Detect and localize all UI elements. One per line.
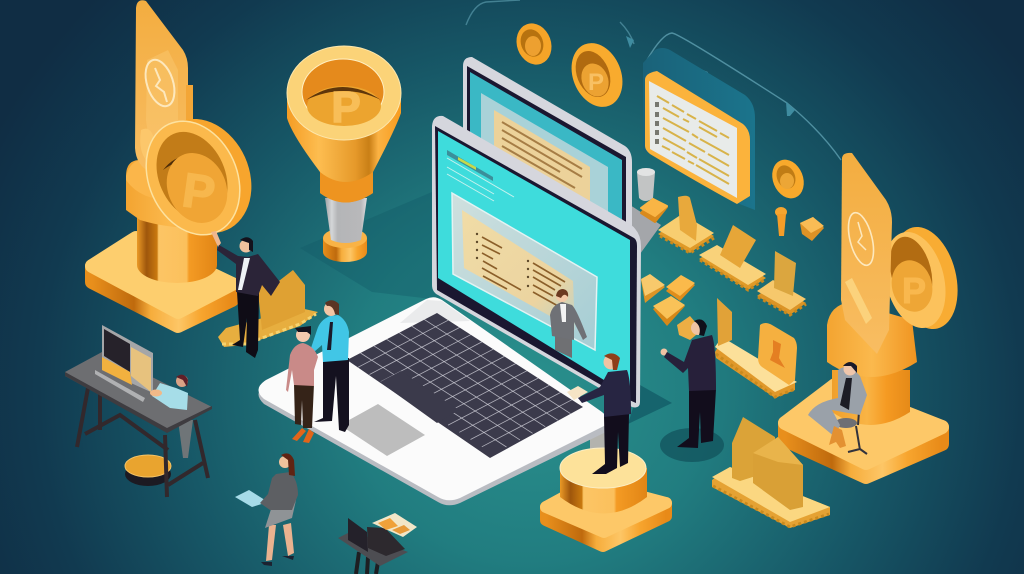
blue shirt tie xyxy=(327,322,333,350)
house plate xyxy=(712,467,830,528)
back frame xyxy=(463,57,632,230)
shirt xyxy=(238,258,250,290)
gold houses on plate xyxy=(712,417,830,528)
floating coin top one xyxy=(511,18,557,70)
small desk with device xyxy=(338,513,417,574)
floor shadow behind laptop xyxy=(300,192,440,300)
pedestal base xyxy=(546,483,666,546)
desk chair xyxy=(178,420,193,458)
legs xyxy=(266,523,294,561)
main laptop xyxy=(258,116,641,505)
funnel rim: P xyxy=(331,83,361,132)
right house xyxy=(753,437,803,510)
funnel collar xyxy=(320,172,373,202)
trophy coin xyxy=(129,103,269,250)
desk legs xyxy=(77,376,208,497)
seated suit xyxy=(808,367,867,437)
long plate xyxy=(715,337,797,398)
floating coin small right xyxy=(767,155,809,203)
pink head xyxy=(295,326,311,342)
card gold frame xyxy=(645,71,750,204)
floor shadow right of laptop xyxy=(628,385,672,424)
legs xyxy=(592,414,629,474)
legs xyxy=(232,292,259,358)
pink torso xyxy=(286,343,318,392)
trophy coin: P xyxy=(179,164,218,221)
jacket xyxy=(260,472,298,510)
amber icon card xyxy=(758,323,797,385)
plate xyxy=(218,308,318,347)
man with raised arm xyxy=(211,231,280,358)
mini bulb xyxy=(775,207,787,236)
laptop support post xyxy=(590,430,606,456)
right upright plate xyxy=(841,153,892,354)
right column xyxy=(832,370,910,425)
card sheet xyxy=(649,81,737,198)
token diamond three xyxy=(653,296,685,326)
back cream sheet xyxy=(494,110,590,205)
skirt xyxy=(265,500,296,528)
small gold tokens right xyxy=(630,168,824,340)
jacket xyxy=(664,335,716,391)
head xyxy=(240,237,253,252)
laptop base xyxy=(258,297,608,505)
chair xyxy=(835,398,867,454)
desk worker xyxy=(150,375,188,410)
back bezel xyxy=(467,66,626,225)
person in grey suit on screen xyxy=(550,289,587,358)
pedestal under person xyxy=(546,448,666,546)
token block behind man xyxy=(677,316,702,340)
mini cube xyxy=(800,217,824,241)
right coin: P xyxy=(902,270,926,311)
pink legs xyxy=(294,384,314,428)
document card xyxy=(643,48,755,210)
token plate near screen xyxy=(641,274,665,303)
crate xyxy=(258,270,305,330)
hands xyxy=(660,348,668,356)
funnel gold body xyxy=(287,95,401,202)
desk with worker xyxy=(65,325,212,497)
coin below desk xyxy=(125,455,171,486)
icon plate with card xyxy=(715,298,797,398)
head xyxy=(691,319,707,336)
screen glass panel xyxy=(452,193,597,350)
blue shirt torso xyxy=(311,315,349,362)
token plate three xyxy=(757,251,806,315)
card text lines xyxy=(657,96,729,184)
gold crate and plate by man xyxy=(218,270,318,347)
pedestal drum xyxy=(560,448,647,514)
token plate one xyxy=(658,196,714,253)
trophy upright plate xyxy=(135,0,193,172)
back cyan screen xyxy=(470,72,622,222)
small desk top xyxy=(338,531,408,566)
laptop bezel xyxy=(435,126,637,403)
right base xyxy=(785,385,942,477)
floating coin top two xyxy=(562,35,632,115)
desk top xyxy=(65,352,212,433)
funnel rim xyxy=(287,46,401,140)
funnel silver stem xyxy=(325,198,367,243)
left trophy xyxy=(92,0,269,326)
trophy base xyxy=(92,238,232,326)
trackpad xyxy=(340,404,425,456)
trophy column xyxy=(126,160,217,283)
small monitor xyxy=(348,518,368,552)
screen header xyxy=(447,150,514,201)
person in blue shirt xyxy=(311,300,349,432)
card blue backing xyxy=(643,48,755,210)
right trophy xyxy=(785,153,968,477)
seated man in grey xyxy=(808,362,867,454)
silver cup xyxy=(637,168,655,201)
funnel coin xyxy=(287,46,401,262)
jacket xyxy=(217,245,280,296)
connector arcs xyxy=(466,0,841,160)
desk monitor xyxy=(95,325,153,402)
person at laptop xyxy=(567,353,631,474)
funnel lower cup xyxy=(323,228,367,262)
silver funnel bracket xyxy=(630,205,661,254)
legs xyxy=(677,389,716,448)
standing man right xyxy=(660,319,724,462)
legs xyxy=(829,426,846,448)
old laptop back screen xyxy=(463,57,632,230)
back glass panel xyxy=(481,93,608,222)
orange shoes xyxy=(292,428,314,443)
laptop screen frame xyxy=(432,116,641,407)
blue shirt head xyxy=(324,300,339,316)
right coin xyxy=(875,220,968,336)
upright slab xyxy=(717,298,732,346)
raised hand xyxy=(211,231,221,247)
open report xyxy=(372,513,417,537)
person in pink sweater xyxy=(286,326,318,443)
screen cream panel xyxy=(462,210,575,330)
floating coin top two: P xyxy=(588,69,604,96)
head xyxy=(279,453,295,476)
small desk legs xyxy=(356,552,378,574)
left house xyxy=(732,417,775,481)
paper xyxy=(235,490,268,507)
head xyxy=(604,353,620,370)
head xyxy=(843,362,857,376)
card bullets xyxy=(655,102,659,144)
keyboard xyxy=(347,313,583,458)
token diamond two xyxy=(666,275,695,301)
floor shadow xyxy=(660,428,724,462)
card xyxy=(567,386,588,400)
tie xyxy=(840,378,852,410)
box xyxy=(367,527,405,556)
token diamond one xyxy=(641,199,667,222)
laptop display xyxy=(438,131,630,396)
shoes xyxy=(261,556,294,566)
right collar xyxy=(827,302,917,377)
woman with papers xyxy=(235,453,298,566)
blue shirt legs xyxy=(314,358,349,432)
token plate two xyxy=(699,225,766,290)
jacket xyxy=(578,370,631,417)
